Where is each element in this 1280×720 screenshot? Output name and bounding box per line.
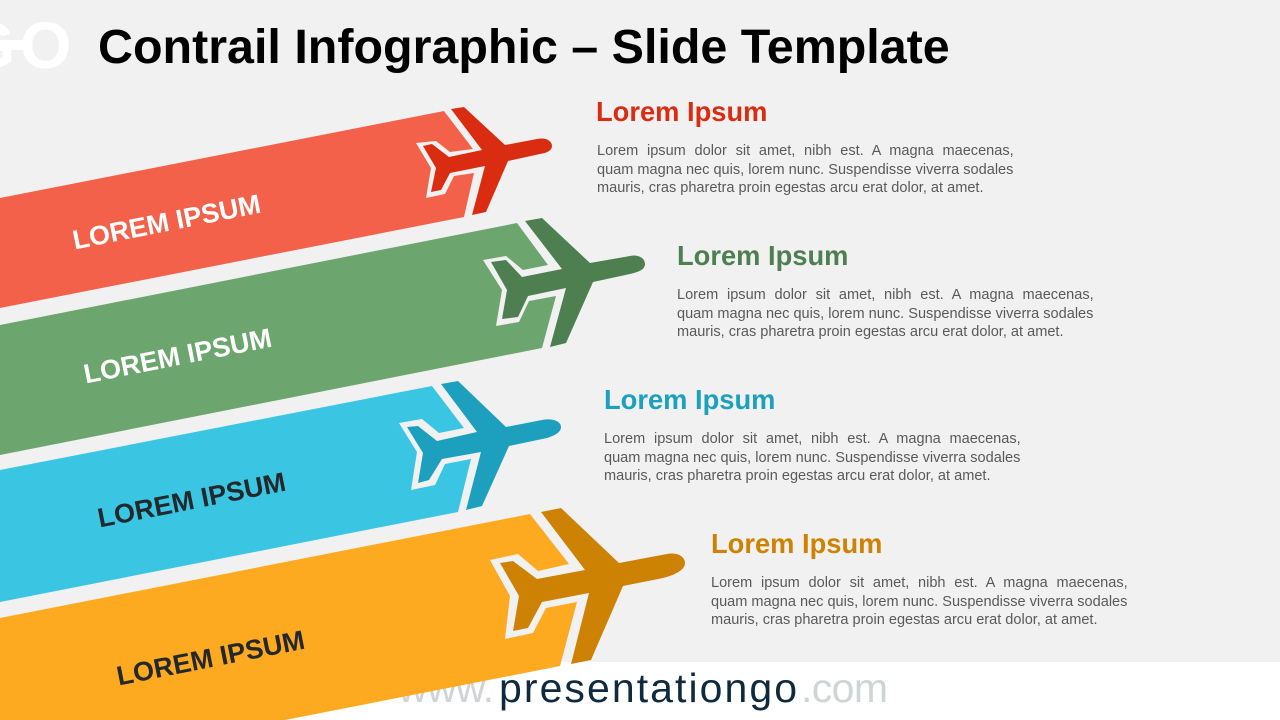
band: green [0,223,556,455]
text block 4: Lorem Ipsum [711,528,882,559]
text block 3: mauris, cras pharetra proin egestas arcu erat dolor, at amet. [604,468,990,484]
band label: LOREM IPSUM [95,467,288,533]
text block 4: Lorem ipsum dolor sit amet, nibh est. A magna maecenas, [711,575,1128,591]
icon: green plane [491,218,645,347]
logo fragment: O [20,8,71,82]
text block 1: quam magna nec quis, lorem nunc. Suspendisse viverra sodales [597,162,1013,178]
band: red [0,111,474,308]
icon: orange plane [500,508,685,664]
text block 1 [596,96,1014,196]
band label: LOREM IPSUM [81,323,274,389]
contrail 4: orange [0,508,685,720]
text block 2: mauris, cras pharetra proin egestas arcu erat dolor, at amet. [677,324,1064,340]
text block 4: quam magna nec quis, lorem nunc. Suspendisse viverra sodales [711,594,1127,610]
text block 2: Lorem Ipsum [677,240,848,271]
contrail 3: blue [0,381,561,602]
text block 1: mauris, cras pharetra proin egestas arcu erat dolor, at amet. [597,180,984,196]
text block 4: mauris, cras pharetra proin egestas arcu erat dolor, at amet. [711,612,1098,628]
footer band [0,662,1280,720]
footer band: www. [397,665,494,711]
text block 2: quam magna nec quis, lorem nunc. Suspendisse viverra sodales [677,306,1093,322]
text block 3: Lorem ipsum dolor sit amet, nibh est. A magna maecenas, [604,431,1021,447]
text block 4 [711,528,1128,628]
text block 3: quam magna nec quis, lorem nunc. Suspendisse viverra sodales [604,450,1020,466]
icon: blue plane [407,381,561,510]
band: blue [0,386,471,602]
footer band: presentationgo [499,665,797,711]
icon: red plane [423,107,552,215]
text block 2 [677,240,1094,340]
title: Contrail Infographic – Slide Template [98,20,950,74]
contrail 1: red [0,107,552,308]
text block 1: Lorem Ipsum [596,96,767,127]
contrail 2: green [0,218,645,455]
text block 2: Lorem ipsum dolor sit amet, nibh est. A magna maecenas, [677,287,1094,303]
footer band: .com [801,665,888,711]
band: orange [0,514,577,720]
band label: LOREM IPSUM [70,189,263,255]
text block 3 [604,384,1021,484]
text block 3: Lorem Ipsum [604,384,775,415]
band label: LOREM IPSUM [114,625,307,691]
text block 1: Lorem ipsum dolor sit amet, nibh est. A magna maecenas, [597,143,1014,159]
